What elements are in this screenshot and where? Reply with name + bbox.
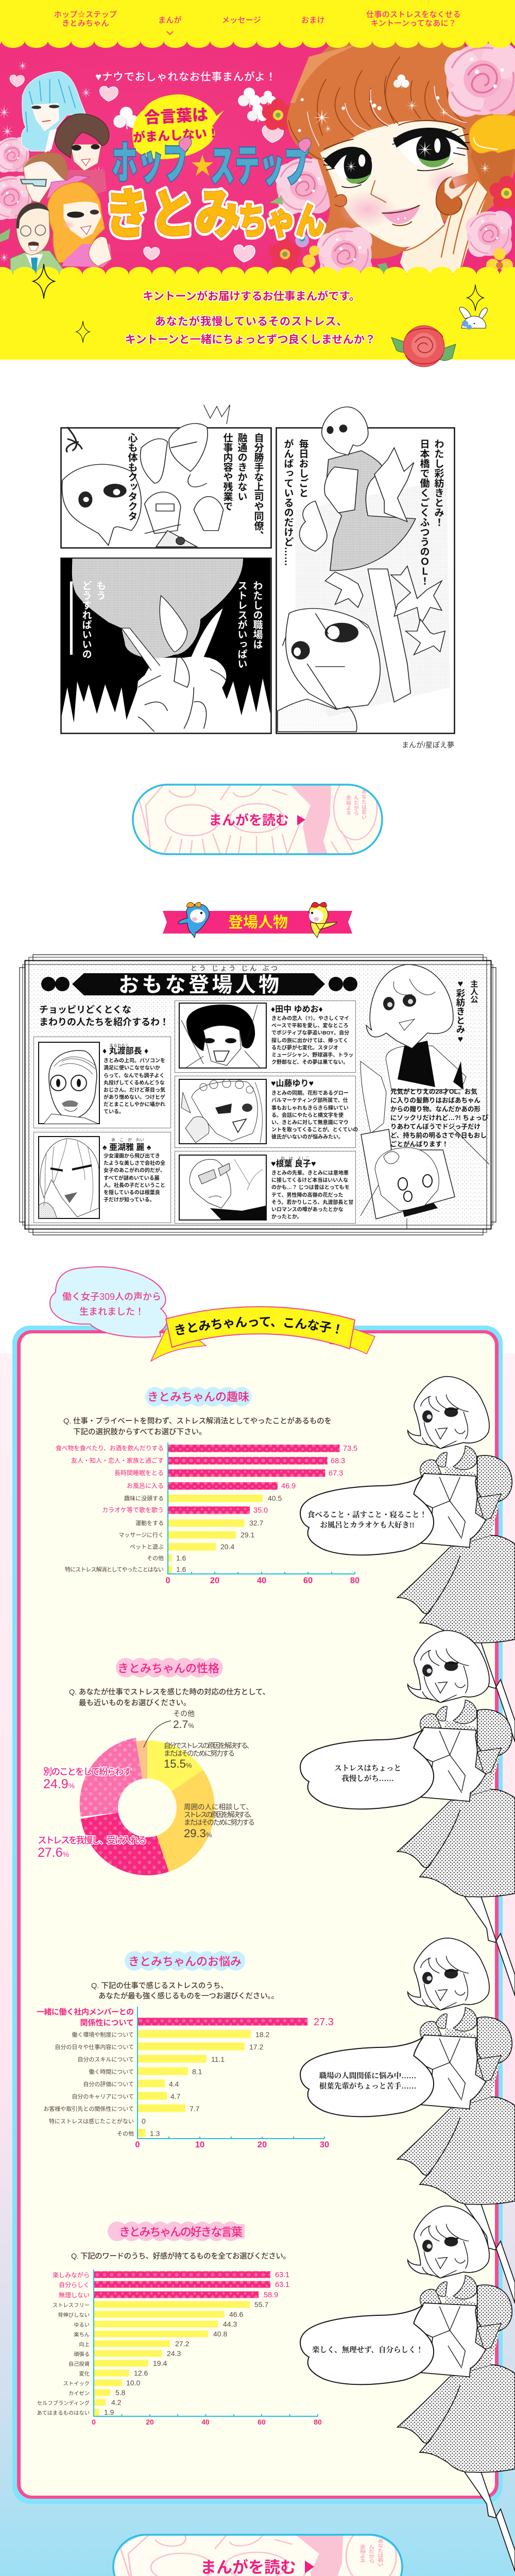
bar chart: favourite words: 46.6 <box>229 2310 243 2318</box>
bar chart: favourite words: 55.7 <box>254 2300 268 2309</box>
manga: panel bottom-left, stress: どうすればいいの <box>80 581 92 659</box>
bar chart: stress relief: ペットと遊ぶ <box>130 1543 164 1550</box>
header navigation: おまけ <box>301 16 325 25</box>
bar chart: workplace stress: 27.3 <box>314 2016 334 2028</box>
bio text: ごとがんばります！ <box>390 1140 449 1148</box>
bar chart: workplace stress: 4.7 <box>170 2092 181 2100</box>
bar chart: favourite words: 背伸びしない <box>58 2312 90 2318</box>
card: 田中ゆめお: ペースで平和を愛し、変なところ <box>271 1022 348 1029</box>
manga credit: まんが/星ぽえ夢 <box>402 741 454 749</box>
card: 山藤ゆり: ントを取ってくることが。とくていの <box>271 1126 358 1133</box>
donut labels: 15.5% <box>164 1757 192 1770</box>
logotype: きとみちゃん: ちゃん <box>238 201 324 242</box>
survey question 1 <box>63 1416 332 1436</box>
card: 田中ゆめお: るたび夢が七変化。スタジオ <box>271 1044 338 1051</box>
bar chart: workplace stress: 0 <box>142 2117 146 2125</box>
card: 山藤ゆり: い、きとみに対して無意識にマウ <box>271 1119 349 1126</box>
bar chart: stress relief: 0 <box>165 1576 170 1585</box>
bar chart: favourite words: 0 <box>92 2418 96 2426</box>
bar chart: workplace stress: 10 <box>195 2140 204 2149</box>
icon: red rose <box>391 326 456 367</box>
donut labels: その他 <box>173 1709 195 1718</box>
bar chart: workplace stress: 17.2 <box>249 2043 263 2051</box>
bar chart: favourite words: 27.2 <box>175 2340 189 2348</box>
card: 丸渡部長: があり憎めない。つけヒゲ <box>104 1094 165 1100</box>
heading: main characters: おもな登場人物 <box>118 974 279 996</box>
survey question 3: あなたが最も強く感じるものを一つお選びください。。 <box>98 1991 279 2001</box>
heroine portrait: Kitomi: ♥彩紡きとみ♥ <box>455 978 466 1044</box>
bar chart: favourite words: 12.6 <box>134 2369 148 2377</box>
card: 亜湖雅麗: 少女漫画から飛び出てき <box>104 1153 160 1159</box>
card: 田中ゆめお: ミュージシャン、野球選手、トラッ <box>271 1052 353 1058</box>
card: 亜湖雅麗: ♠ 亜湖雅 麗 ♠ <box>102 1143 151 1152</box>
bar chart: favourite words: ゆるい <box>74 2322 90 2328</box>
card: 丸渡部長: おじさん。だけど茶目っ気 <box>104 1087 165 1093</box>
card: 亜湖雅麗: たような美しさで会社の全 <box>104 1160 165 1166</box>
bar chart: favourite words: 頑張る <box>74 2351 90 2358</box>
character with speech bubble: hobby: 食べること・話すこと・寝ること！ <box>307 1510 427 1519</box>
illustration: kitomi watercolour portrait <box>262 41 515 282</box>
bar chart: favourite words: セルフブランディング <box>37 2400 90 2406</box>
card: 山藤ゆり: 彼氏がいないのが悩みみたい。 <box>271 1133 344 1140</box>
card: 山藤ゆり: きとみの同期。花形であるグロー <box>271 1090 349 1096</box>
bar chart: stress relief: 友人・知人・恋人・家族と過ごす <box>71 1456 164 1464</box>
donut labels: 24.9% <box>43 1777 75 1791</box>
donut labels: 27.6% <box>38 1845 69 1860</box>
bar chart: stress relief: 80 <box>350 1576 359 1585</box>
header navigation: メッセージ <box>222 16 261 25</box>
bar chart: workplace stress: 自分の評価について <box>83 2081 134 2088</box>
icon: yellow bird <box>309 902 337 938</box>
bar chart: favourite words: ストレスフリー <box>53 2303 90 2309</box>
card: 根葉良子: かったとか。 <box>271 1214 302 1220</box>
card: 亜湖雅麗: すべてが謎めいている麗 <box>104 1175 160 1181</box>
bar chart: favourite words: 20 <box>146 2418 154 2426</box>
bar chart: favourite words: 無理しない <box>59 2291 90 2299</box>
bar chart: stress relief: 68.3 <box>331 1457 345 1465</box>
intro text: あなたが我慢しているそのストレス、 <box>154 315 348 328</box>
bar chart: stress relief: 20 <box>210 1576 219 1585</box>
callout: 309 women: 働く女子309人の声から <box>62 1292 161 1302</box>
manga: panel right, Kitomi introduction: 日本橋で働くごくふつうのＯＬ！ <box>418 439 430 586</box>
bar chart: workplace stress: 一緒に働く社内メンバーとの <box>37 2007 134 2016</box>
bar chart: workplace stress: 自分のスキルについて <box>77 2056 134 2063</box>
donut labels: ストレスの原因を解決する、 <box>184 1811 256 1819</box>
card: 亜湖雅麗: 女子のあこがれの的だが、 <box>104 1167 165 1174</box>
bar chart: favourite words: 楽しみながら <box>53 2271 90 2279</box>
character with speech bubble: worries: 職場の人間関係に悩み中…… <box>319 2071 416 2080</box>
subtitle: ♥ナウでおしゃれなお仕事まんがよ！ <box>95 71 276 83</box>
card: 根葉良子: ♥根葉 良子♥ <box>271 1159 316 1168</box>
bio text: にソックリだけれど…?! ちょっぴ <box>390 1114 489 1122</box>
card: 田中ゆめお: ♦田中 ゆめお♦ <box>271 1005 323 1014</box>
donut labels: 周囲の人に相談して、 <box>184 1803 253 1811</box>
bar chart: stress relief: 60 <box>303 1576 313 1585</box>
callout: 309 women <box>50 1267 167 1337</box>
donut labels: 29.3% <box>184 1827 212 1840</box>
bar chart: workplace stress: 18.2 <box>255 2030 269 2039</box>
bar chart: workplace stress: 8.1 <box>192 2067 202 2076</box>
card: 山藤ゆり: る。会話にやたらと横文字を使 <box>271 1112 344 1118</box>
bar chart: favourite words: カイゼン <box>68 2391 90 2397</box>
sparkles <box>33 264 484 361</box>
bio text: ど、持ち前の明るさで今日もおし <box>390 1131 487 1139</box>
manga: panel bottom-left, stress: もう <box>95 581 106 600</box>
survey question 1: 下記の選択肢からすべてお選び下さい。 <box>73 1428 207 1436</box>
bar chart: favourite words: 1.9 <box>104 2408 114 2416</box>
bar chart: stress relief: 67.3 <box>329 1469 343 1478</box>
speech cloud: 合言葉はがまんしない <box>132 94 224 159</box>
header navigation: まんが <box>158 15 182 25</box>
button: read the manga <box>133 776 382 854</box>
donut labels <box>38 1709 256 1860</box>
bar chart: stress relief: 20.4 <box>220 1543 234 1551</box>
card: 根葉良子: に接してくるけど本当はいい人な <box>271 1177 348 1183</box>
intro text <box>125 290 375 346</box>
bio text: からの贈り物。なんだかあの形 <box>390 1105 481 1113</box>
bar chart: workplace stress: 4.4 <box>169 2080 179 2088</box>
bar chart: favourite words: 80 <box>314 2418 322 2426</box>
bar chart: workplace stress: その他 <box>117 2130 134 2137</box>
manga: panel right, Kitomi introduction: がんばっているのだけど…… <box>282 438 294 566</box>
card: 丸渡部長: まるわたし <box>109 1043 130 1048</box>
character with speech bubble: worries: 根葉先輩がちょっと苦手…… <box>319 2081 416 2091</box>
intro text: キントーンと一緒にちょっとずつ良くしませんか？ <box>125 333 375 346</box>
speech cloud: 合言葉はがまんしない: 合言葉は <box>144 106 209 127</box>
panel: survey frame <box>12 1326 503 2504</box>
manga: panel bottom-left, stress: ストレスがいっぱい <box>236 581 247 669</box>
header navigation: ホップ☆ステップ <box>54 10 117 19</box>
card: 根葉良子 <box>175 1151 355 1223</box>
header navigation: 仕事のストレスをなくせる <box>366 10 461 19</box>
card: 亜湖雅麗: あ こ が れい <box>111 1137 144 1142</box>
donut labels: またはそのために努力する <box>184 1819 255 1826</box>
bar chart: workplace stress: 11.1 <box>211 2055 225 2063</box>
card: 田中ゆめお: でポジティブな夢追いBOY。自分 <box>271 1029 349 1036</box>
survey section background <box>0 1353 515 2576</box>
bar chart: favourite words <box>37 2269 322 2426</box>
bar chart: favourite words: 24.3 <box>167 2349 181 2358</box>
portrait <box>39 1042 99 1124</box>
bar chart: favourite words: 40 <box>201 2418 210 2426</box>
section ribbon: characters <box>163 902 352 938</box>
portrait <box>179 1155 266 1220</box>
bar chart: workplace stress: 働く時間について <box>89 2069 134 2075</box>
donut labels: またはそのために努力する <box>164 1750 235 1757</box>
bar chart: favourite words: 変化 <box>79 2370 90 2377</box>
logotype: ホップ☆ステップ: ホップ <box>112 139 189 188</box>
bar chart: stress relief: マッサージに行く <box>118 1532 164 1538</box>
bar chart: favourite words: ストイック <box>63 2381 90 2387</box>
card: 山藤ゆり: 事もおしゃれもきらきら輝いてい <box>271 1105 349 1111</box>
panel: main characters frame <box>20 955 496 1235</box>
manga: panel top-left, colleagues: 心も体もクッタクタ <box>127 433 138 521</box>
section heading: favourite words: きとみちゃんの好きな言葉 <box>119 2226 243 2239</box>
bar chart: stress relief: 40.5 <box>268 1494 282 1502</box>
bar chart: stress relief: 特にストレス解消としてやったことはない <box>65 1566 164 1573</box>
section ribbon: characters: 登場人物 <box>228 914 288 931</box>
bar chart: favourite words: 44.3 <box>223 2320 237 2328</box>
bar chart: favourite words: 自分らしく <box>59 2281 90 2289</box>
card: 亜湖雅麗: を隠しているのは根葉良 <box>104 1189 160 1196</box>
section heading: worries: きとみちゃんのお悩み <box>128 1955 242 1968</box>
portrait <box>179 1079 266 1144</box>
button: read the manga, bottom <box>113 2527 402 2576</box>
bar chart: workplace stress: 自分のキャリアについて <box>72 2093 134 2100</box>
bar chart: favourite words: 58.9 <box>264 2291 278 2299</box>
icon: rabbit <box>459 307 487 330</box>
card: 亜湖雅麗 <box>34 1132 171 1223</box>
logotype: きとみちゃん: きとみ <box>105 185 241 245</box>
bar chart: workplace stress: お客様や取引先との関係性について <box>43 2105 134 2112</box>
bar chart: stress relief: 73.5 <box>343 1445 357 1453</box>
bar chart: workplace stress: 30 <box>320 2140 329 2149</box>
bio text: 元気がとりえの28才OL。お気 <box>390 1088 477 1095</box>
bar chart: stress relief: 1.6 <box>176 1554 186 1562</box>
bar chart: stress relief: 46.9 <box>281 1482 296 1490</box>
bar chart: workplace stress: 1.3 <box>150 2129 160 2138</box>
card: 田中ゆめお <box>175 1001 355 1073</box>
character with speech bubble: personality <box>300 1631 515 1996</box>
donut labels: 別のことをして紛らわす <box>43 1767 132 1777</box>
bar chart: stress relief: 35.0 <box>253 1506 268 1515</box>
survey question 2: Q. あなたが仕事でストレスを感じた時の対応の仕方として、 <box>69 1687 270 1697</box>
manga: panel right, Kitomi introduction: わたし彩紡きとみ！ <box>433 439 444 527</box>
header navigation: きとみちゃん <box>62 19 109 28</box>
card: 根葉良子: のかも…？ じつは昔はとってもモ <box>271 1184 349 1191</box>
bar chart: stress relief: カラオケ等で歌を歌う <box>102 1506 164 1514</box>
bar chart: favourite words: 19.4 <box>153 2359 167 2367</box>
bar chart: workplace stress: 関係性について <box>80 2019 134 2027</box>
logotype: ホップ☆ステップ <box>112 138 311 191</box>
hero illustration panel <box>0 41 515 282</box>
button: read the manga, bottom: まんがを読む <box>200 2558 296 2576</box>
bio text: に入りの髪飾りはおばあちゃん <box>390 1096 480 1104</box>
card: 丸渡部長 <box>34 1037 171 1128</box>
character with speech bubble: personality: ストレスはちょっと <box>334 1764 401 1773</box>
bar chart: favourite words: 63.1 <box>275 2271 289 2279</box>
survey question 2: 最も近いものをお選びください。 <box>79 1699 191 1707</box>
bar chart: workplace stress: 特にストレスは感じたことがない <box>49 2117 134 2125</box>
yellow intro band <box>0 41 515 367</box>
heading: main characters <box>41 964 357 996</box>
bar chart: favourite words: 40.8 <box>213 2330 227 2338</box>
card: 根葉良子: そう。若かりしころ、丸渡部長と甘 <box>271 1199 353 1206</box>
bar chart: favourite words: 5.8 <box>115 2388 126 2397</box>
ribbon heading: きとみちゃんって、こんな子！ <box>150 1306 375 1362</box>
card: 根葉良子: テて、男性陣の高嶺の花だった <box>271 1192 343 1198</box>
card: 亜湖雅麗: 人。社長の子だということ <box>104 1182 165 1189</box>
bar chart: favourite words: 10.0 <box>126 2379 140 2387</box>
card: 田中ゆめお: ク野郎など、その夢は果てない。 <box>271 1059 348 1065</box>
section heading: personality: きとみちゃんの性格 <box>117 1662 219 1675</box>
logotype: ホップ☆ステップ: ステップ <box>210 142 309 191</box>
inset: mini Kitomi <box>360 1128 489 1229</box>
card: 山藤ゆり: バルマーケティング部所属で、仕 <box>271 1097 348 1104</box>
bar chart: workplace stress: 自分の日々や仕事内容について <box>55 2043 134 2050</box>
card: 山藤ゆり: ♥山藤ゆり♥ <box>271 1079 314 1088</box>
bar chart: workplace stress: 働く環境や制度について <box>72 2031 134 2038</box>
intro text: キントーンがお届けするお仕事まんがです。 <box>143 290 360 302</box>
card: 亜湖雅麗: 子だけが知っている。 <box>104 1196 154 1203</box>
bar chart: stress relief <box>56 1443 359 1585</box>
decorative hearts and clovers <box>0 61 283 263</box>
bar chart: stress relief: 運動をする <box>135 1519 164 1527</box>
card: 根葉良子: きとみの先輩。きとみには意地悪 <box>271 1170 349 1176</box>
bar chart: favourite words: あてはまるものはない <box>37 2410 90 2416</box>
bar chart: stress relief: 1.6 <box>176 1565 186 1573</box>
manga: panel right, Kitomi introduction: 毎日おしごと <box>298 439 308 498</box>
bar chart: favourite words: 60 <box>258 2418 266 2426</box>
manga: panel bottom-left, stress <box>61 558 271 734</box>
character with speech bubble: favourite words <box>300 2206 515 2571</box>
bar chart: stress relief: 32.7 <box>249 1519 263 1527</box>
logotype: きとみちゃん: きとみ <box>105 185 241 245</box>
card: 田中ゆめお: きとみの恋人（?）。やさしくマイ <box>271 1015 349 1022</box>
survey question 3 <box>91 1981 279 2001</box>
bar chart: workplace stress: 0 <box>135 2140 140 2149</box>
bar chart: workplace stress <box>37 2007 334 2149</box>
header navigation: キントーンってなあに？ <box>371 19 456 28</box>
callout: 309 women: 生まれました！ <box>79 1307 144 1317</box>
donut chart: response to stress <box>38 1709 256 1875</box>
intro text <box>39 1005 169 1027</box>
survey question 4: Q. 下記のワードのうち、好感が持てるものを全てお選びください。 <box>71 2251 290 2261</box>
portrait <box>179 1003 266 1068</box>
card: 丸渡部長: だとまことしやかに囁かれ <box>104 1101 165 1108</box>
bar chart: favourite words: 向上 <box>79 2341 90 2348</box>
character with speech bubble: hobby: お風呂とカラオケも大好き!! <box>320 1520 415 1530</box>
heading: main characters: とう じょう じん ぶつ <box>191 964 278 972</box>
bar chart: workplace stress: 7.7 <box>190 2105 200 2113</box>
bar chart: stress relief: お風呂に入る <box>127 1482 164 1489</box>
manga: panel top-left, colleagues <box>61 405 271 548</box>
card: 丸渡部長: 丸投げしてくるめんどうな <box>104 1079 165 1086</box>
manga: panel right, Kitomi introduction <box>276 407 454 734</box>
portrait <box>39 1137 99 1218</box>
manga: panel bottom-left, stress: わたしの職場は <box>251 581 263 649</box>
donut labels: 2.7% <box>173 1719 194 1731</box>
section heading: hobbies: きとみちゃんの趣味 <box>147 1391 249 1403</box>
bar chart: favourite words: 楽ちん <box>74 2331 90 2338</box>
card: 根葉良子: いロマンスの噂があったとかな <box>271 1206 344 1213</box>
manga: panel top-left, colleagues: 仕事内容や残業で <box>221 433 233 511</box>
card: 丸渡部長: きとみの上司。パソコンを <box>104 1057 165 1064</box>
card: 山藤ゆり <box>175 1076 358 1148</box>
donut labels: ストレスを我慢し、受け入れる <box>38 1835 147 1845</box>
heroine portrait: Kitomi <box>360 964 489 1229</box>
icon: blue bird <box>178 902 209 938</box>
bar chart: favourite words: 4.2 <box>111 2398 122 2406</box>
manga: panel top-left, colleagues: 融通のきかない <box>236 433 247 501</box>
bar chart: stress relief: 29.1 <box>241 1531 254 1539</box>
character with speech bubble: hobby <box>300 1377 515 1742</box>
ribbon heading: きとみちゃんって、こんな子！: きとみちゃんって、こんな子！ <box>175 1317 340 1335</box>
bar chart: stress relief: その他 <box>147 1555 164 1562</box>
manga: panel top-left, colleagues: 自分勝手な上司や同僚、 <box>252 433 264 540</box>
bio text <box>390 1088 489 1148</box>
bar chart: stress relief: 40 <box>257 1576 266 1585</box>
bar chart: favourite words: 自己投資 <box>68 2361 90 2367</box>
survey question 2 <box>69 1687 270 1707</box>
character with speech bubble: favourite words: 楽しく、無理せず、自分らしく！ <box>312 2345 423 2354</box>
survey question 3: Q. 下記の仕事で感じるストレスのうち、 <box>91 1981 228 1990</box>
logotype: きとみちゃん: ちゃん <box>238 201 324 242</box>
bar chart: workplace stress: 20 <box>258 2140 267 2149</box>
card: 丸渡部長: ♦ 丸渡部長 ♦ <box>102 1046 148 1056</box>
donut labels: 自分でストレスの原因を解決する、 <box>164 1742 253 1750</box>
card: 丸渡部長: ている。 <box>104 1109 124 1115</box>
intro text: まわりの人たちを紹介するわ！ <box>39 1017 169 1027</box>
header navigation <box>0 0 515 41</box>
bar chart: stress relief: 食べ物を食べたり、お酒を飲んだりする <box>56 1444 164 1452</box>
bar chart: stress relief: 趣味に没頭する <box>124 1495 164 1502</box>
character label: 主人公 <box>470 979 478 1003</box>
character with speech bubble: personality: 我慢しがち…… <box>341 1774 394 1783</box>
bar chart: favourite words: 63.1 <box>275 2281 289 2289</box>
bio text: りあわてんぼうでドジっ子だけ <box>390 1123 480 1130</box>
card: 丸渡部長: らって、なんでも調子よく <box>104 1073 165 1079</box>
card: 根葉良子: ね は よしこ <box>281 1156 310 1161</box>
bar chart: stress relief: 長時間睡眠をとる <box>114 1469 164 1477</box>
illustration: five supporting characters <box>0 71 112 275</box>
card: 丸渡部長: 満足に使いこなせないか <box>104 1064 160 1071</box>
card: 田中ゆめお: 探しの旅に出かけては、帰ってく <box>271 1037 348 1044</box>
speech cloud: 合言葉はがまんしない: がまんしない！ <box>132 126 220 145</box>
intro text: チョッピリどくとくな <box>39 1005 131 1015</box>
survey question 1: Q. 仕事・プライベートを問わず、ストレス解消法としてやったことがあるものを <box>63 1416 332 1426</box>
character with speech bubble: worries <box>300 1938 515 2303</box>
button: read the manga: まんがを読む <box>209 812 289 828</box>
